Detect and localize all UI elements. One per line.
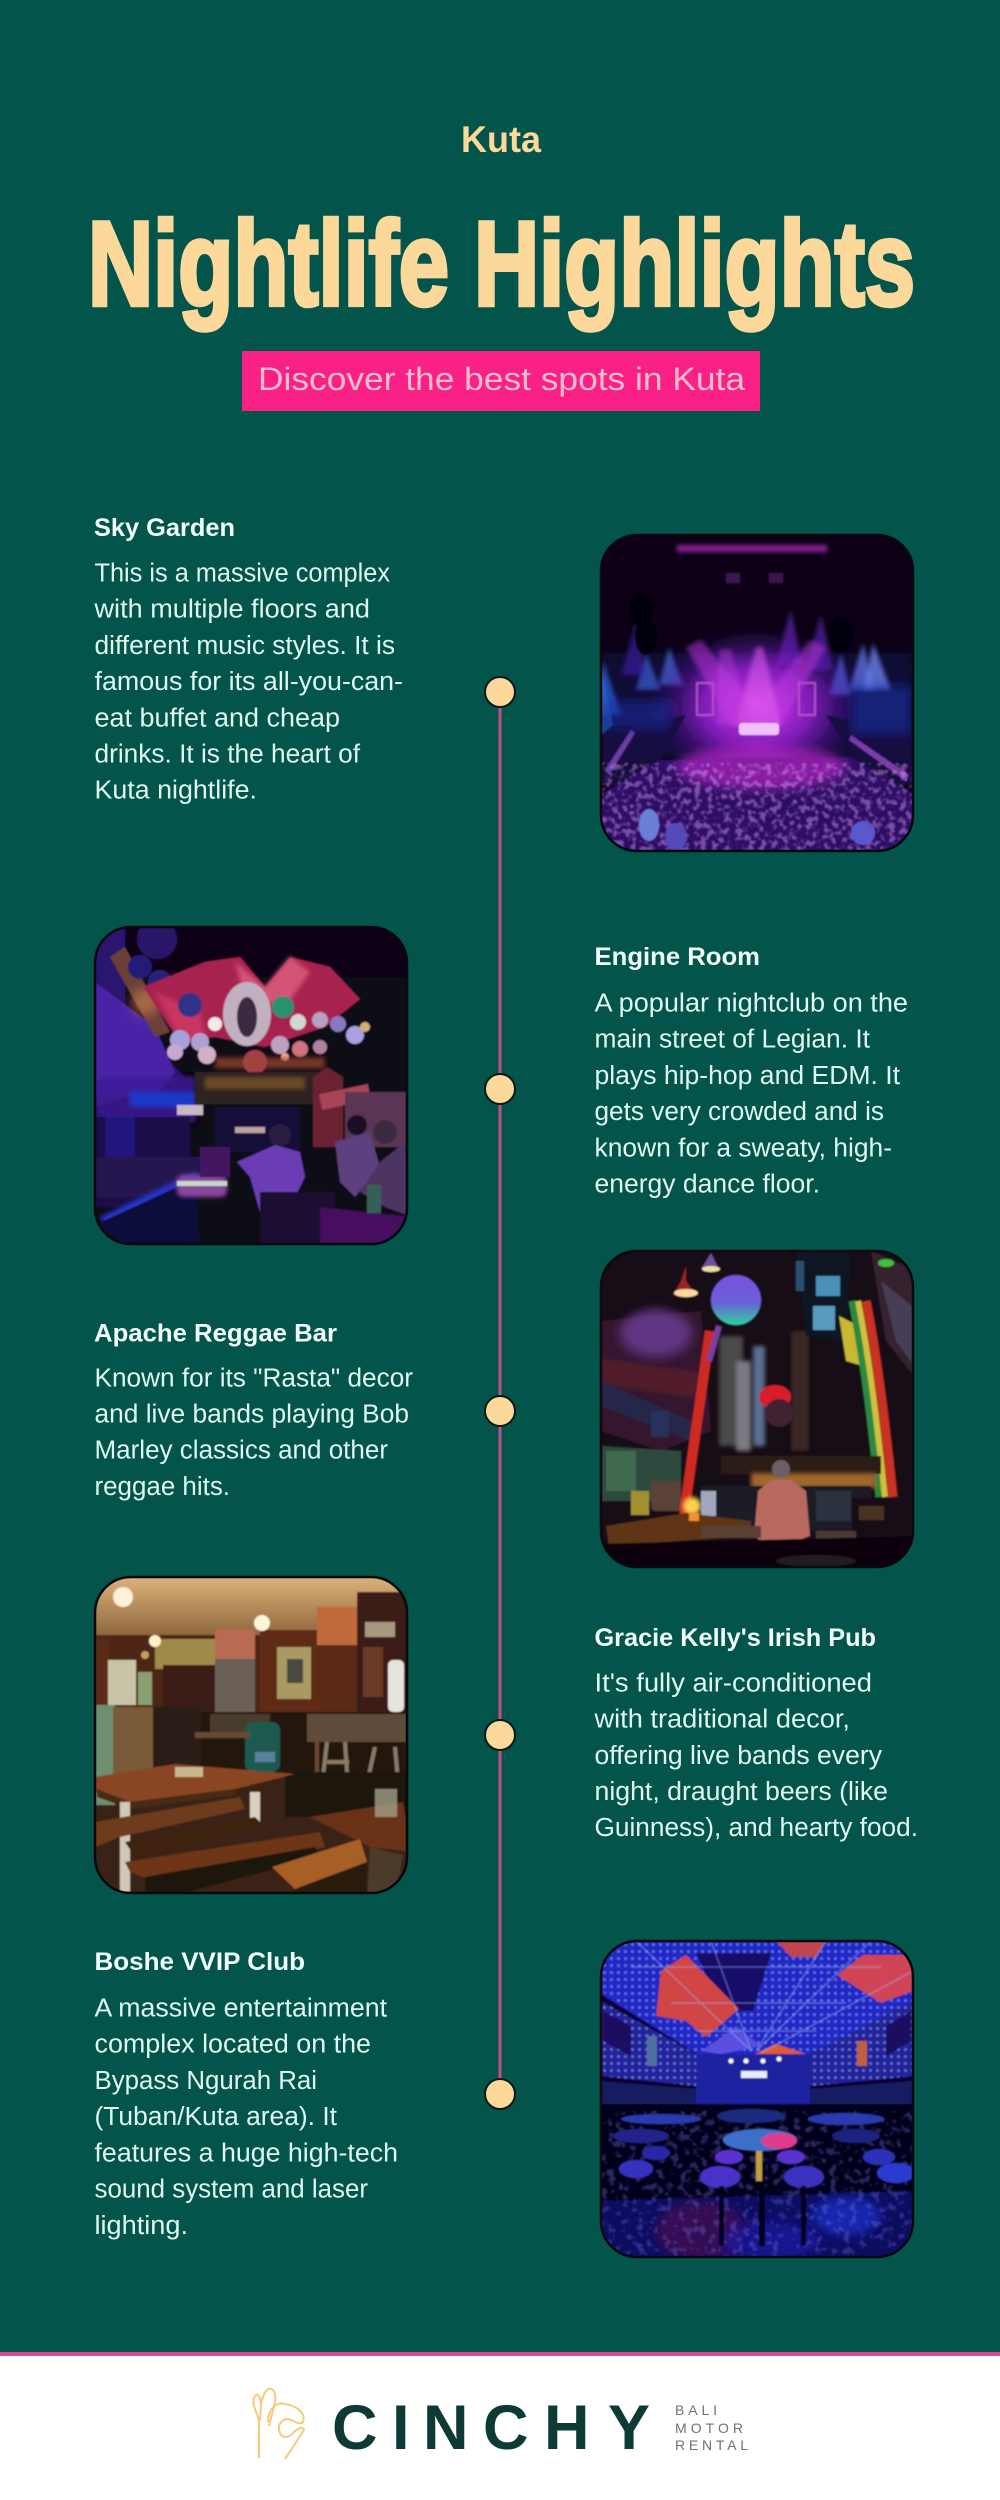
text block: Gracie Kelly's Irish Pub: night, draught beers (like [594, 1778, 888, 1806]
text block: Sky Garden: with multiple floors and [93, 596, 370, 624]
footer panel [0, 2352, 1000, 2500]
text block: Boshe VVIP Club: (Tuban/Kuta area). It [94, 2103, 337, 2131]
photo: Sky Garden stage and crowd [596, 530, 918, 856]
timeline dot 1 [485, 677, 515, 707]
text block: Gracie Kelly's Irish Pub: Gracie Kelly's Irish Pub [594, 1624, 876, 1652]
text block: Sky Garden: This is a massive complex [94, 560, 390, 588]
text block: Gracie Kelly's Irish Pub [593, 1624, 918, 1842]
text block: Apache Reggae Bar: Apache Reggae Bar [94, 1320, 337, 1348]
text block: Sky Garden: different music styles. It is [94, 632, 395, 660]
text block: Apache Reggae Bar: Marley classics and other [94, 1436, 389, 1464]
text block: Gracie Kelly's Irish Pub: with traditional decor, [593, 1706, 850, 1734]
photo: Engine Room disco interior [90, 919, 412, 1249]
text block: Engine Room: main street of Legian. It [594, 1026, 870, 1054]
text block: Engine Room: plays hip-hop and EDM. It [594, 1062, 900, 1090]
text block: Engine Room: known for a sweaty, high- [594, 1135, 892, 1163]
logo wordmark: CINCHY [332, 2393, 650, 2463]
text block: Engine Room: A popular nightclub on the [594, 990, 908, 1018]
text block: Engine Room: energy dance floor. [594, 1171, 820, 1199]
timeline [485, 677, 515, 2109]
text block: Boshe VVIP Club: complex located on the [94, 2031, 371, 2059]
photo: Boshe VVIP Club LED interior [596, 1936, 918, 2262]
text block: Sky Garden: famous for its all-you-can- [94, 668, 403, 696]
text block: Boshe VVIP Club [94, 1948, 398, 2240]
text block: Sky Garden: drinks. It is the heart of [94, 741, 361, 769]
text block: Sky Garden: Sky Garden [94, 514, 235, 542]
text block: Apache Reggae Bar: reggae hits. [94, 1473, 230, 1501]
logo tagline: BALI [675, 2402, 717, 2418]
logo tagline [675, 2402, 748, 2453]
logo icon: hand [253, 2389, 304, 2459]
eyebrow: Kuta: Kuta [461, 119, 541, 160]
text block: Boshe VVIP Club: lighting. [94, 2212, 188, 2240]
text block: Apache Reggae Bar: and live bands playing Bob [94, 1401, 409, 1429]
text block: Engine Room [594, 943, 908, 1199]
text block: Boshe VVIP Club: Bypass Ngurah Rai [94, 2067, 317, 2095]
logo tagline: MOTOR [675, 2420, 743, 2436]
text block: Sky Garden: eat buffet and cheap [94, 705, 340, 733]
text block: Gracie Kelly's Irish Pub: offering live bands every [594, 1742, 882, 1770]
text block: Gracie Kelly's Irish Pub: It's fully air-conditioned [594, 1670, 872, 1698]
text block: Sky Garden: Kuta nightlife. [94, 776, 257, 804]
text block: Boshe VVIP Club: sound system and laser [94, 2176, 369, 2204]
timeline dot 4 [485, 1720, 515, 1750]
subtitle banner [242, 351, 760, 411]
text block: Boshe VVIP Club: features a huge high-tech [94, 2140, 398, 2168]
logo tagline: RENTAL [675, 2437, 748, 2453]
text block: Apache Reggae Bar [94, 1320, 414, 1501]
text block: Sky Garden [93, 514, 403, 804]
text block: Boshe VVIP Club: Boshe VVIP Club [94, 1948, 305, 1976]
text block: Boshe VVIP Club: A massive entertainment [94, 1995, 387, 2023]
timeline dot 2 [485, 1074, 515, 1104]
photo: Gracie Kelly's pub interior [90, 1572, 412, 1898]
text block: Engine Room: gets very crowded and is [594, 1098, 884, 1126]
timeline dot 3 [485, 1396, 515, 1426]
text block: Apache Reggae Bar: Known for its "Rasta" decor [94, 1365, 414, 1393]
text block: Engine Room: Engine Room [594, 943, 760, 971]
text block: Gracie Kelly's Irish Pub: Guinness), and hearty food. [594, 1814, 918, 1842]
subtitle banner: Discover the best spots in Kuta [258, 361, 745, 397]
photo: Apache Reggae Bar interior [596, 1246, 918, 1572]
timeline dot 5 [485, 2079, 515, 2109]
